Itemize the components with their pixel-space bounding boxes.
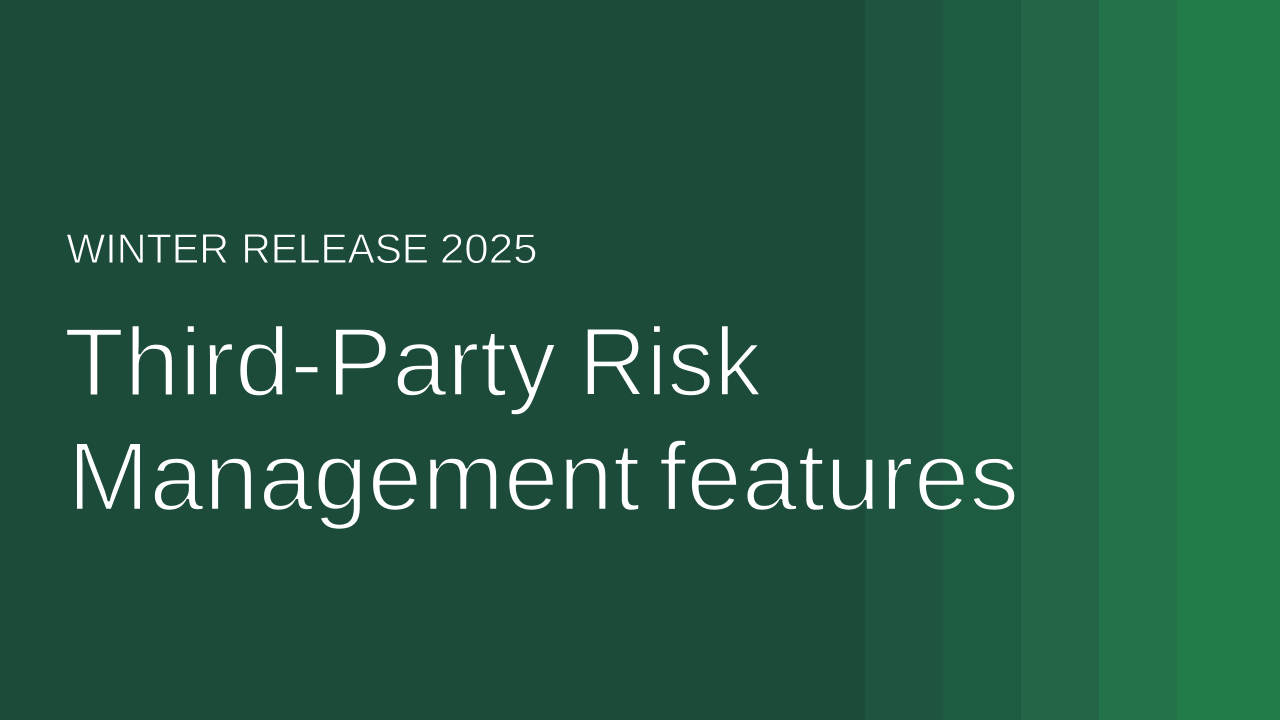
title line 1: Risk	[579, 308, 762, 417]
title line 1: Party	[327, 308, 557, 417]
title	[64, 308, 1019, 531]
title line 2	[68, 422, 1019, 531]
eyebrow: release label	[66, 225, 538, 272]
title line 1	[64, 308, 762, 417]
gradient stripes	[865, 0, 1280, 720]
title line 2: features	[659, 422, 1019, 531]
eyebrow: release label: 2025	[440, 225, 538, 272]
title line 1: Third-	[64, 308, 323, 417]
title line 2: Management	[68, 422, 640, 531]
eyebrow: release label: RELEASE	[241, 225, 429, 272]
eyebrow: release label: WINTER	[66, 225, 229, 272]
